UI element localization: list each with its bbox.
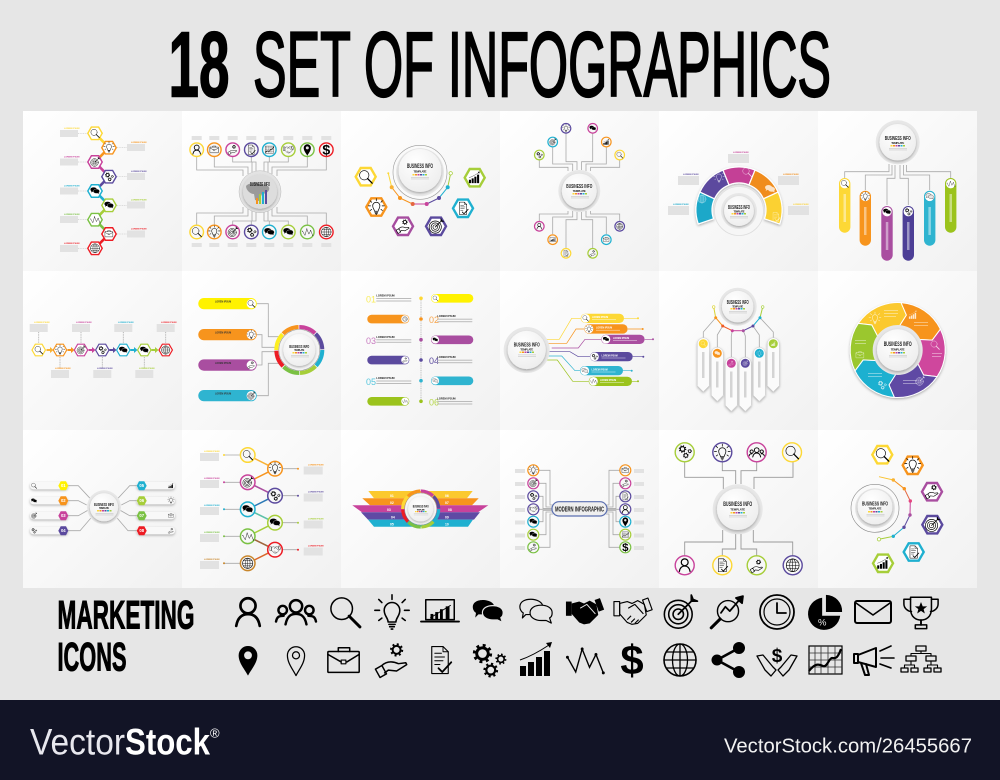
panel: half donut chart with five segments: LOREM IPSUM — [733, 152, 749, 154]
panel: circular zigzag chain — [200, 448, 324, 571]
panel: winged bands around ring: 08 — [448, 508, 452, 512]
panel: hub with eight large circle nodes: TEMPLATE — [730, 508, 745, 512]
icon: hands with dollar — [757, 646, 797, 676]
heading: marketing icons — [58, 594, 194, 680]
icon: target — [664, 595, 697, 628]
icon: filled pin — [239, 646, 257, 676]
panel: circular zigzag chain: LOREM IPSUM — [308, 492, 324, 494]
panel: horizontal hexagon timeline: LOREM IPSUM — [118, 322, 134, 324]
icon: outline handshake — [614, 598, 652, 624]
icon: envelope — [855, 601, 891, 623]
panel: horizontal hexagon timeline: LOREM IPSUM — [76, 322, 92, 324]
panel: six arrow cycle diagram: BUSINESS INFO — [884, 342, 912, 348]
panel: hub with eight large circle nodes — [675, 443, 802, 575]
panel: arc with hanging banner cards — [697, 288, 779, 411]
icon: outline chat — [520, 599, 552, 623]
panel: pills feeding colour ring — [198, 298, 332, 401]
icon: globe — [664, 644, 696, 676]
panel: winged bands around ring: 06 — [445, 494, 449, 498]
panel: numbered vertical timeline: 04 — [429, 356, 439, 366]
panel: hub with six small nodes top and bottom: TEMPLATE — [573, 189, 586, 193]
panel: circular zigzag chain: LOREM IPSUM — [308, 546, 324, 548]
panel: hub with eight nodes top and bottom: BUSINESS INFO — [250, 182, 270, 188]
panel: eight numbered rows around hub — [30, 481, 175, 535]
panel: eight numbered rows around hub: 06 — [139, 498, 145, 503]
panel: pills feeding colour ring: LOREM IPSUM — [215, 302, 231, 304]
panel: pills feeding colour ring: LOREM IPSUM — [215, 394, 231, 396]
panel: numbered vertical timeline: LOREM IPSUM — [376, 335, 395, 339]
panel: eight numbered rows around hub: 04 — [61, 528, 66, 533]
panel: numbered vertical timeline: 01 — [366, 294, 376, 304]
panel: hexagons around right arc: BUSINESS INFO — [862, 502, 888, 508]
heading: marketing icons: ICONS — [58, 636, 126, 680]
panel: half donut chart with five segments: LOREM IPSUM — [683, 174, 699, 176]
panel: circular zigzag chain: LOREM IPSUM — [204, 532, 220, 534]
panel: numbered vertical timeline: LOREM IPSUM — [376, 294, 395, 298]
panel: half donut chart with five segments: BUSINESS INFO — [728, 205, 750, 211]
panel: eight numbered rows around hub: 01 — [61, 483, 66, 488]
panel: winged bands around ring: 10 — [445, 523, 449, 527]
heading: marketing icons: MARKETING — [58, 594, 194, 638]
panel backgrounds grid — [23, 111, 977, 588]
panel: disc with lines to staggered pills: TEMPLATE — [520, 348, 533, 352]
panel: half donut chart with five segments — [668, 152, 809, 236]
icon: gears — [474, 645, 506, 676]
panel: hexagon zigzag chain: LOREM IPSUM — [131, 142, 147, 144]
panel: circular zigzag chain: LOREM IPSUM — [204, 451, 220, 453]
icon row 1 — [236, 595, 938, 630]
panel: eight numbered rows around hub: 05 — [139, 483, 145, 488]
panel: disc with lines to staggered pills: LOREM IPSUM — [596, 328, 612, 330]
panel: hexagon zigzag chain — [60, 127, 147, 255]
icon: pie chart — [808, 595, 842, 630]
icon: laptop chart — [421, 600, 459, 622]
icon: trophy — [904, 597, 938, 629]
icon: megaphone — [854, 646, 894, 675]
panel: horizontal hexagon timeline: LOREM IPSUM — [55, 368, 71, 370]
icon: filled chat — [473, 600, 503, 622]
panel: hub with six small nodes top and bottom: BUSINESS INFO — [566, 184, 593, 190]
panel: eight numbered rows around hub: 03 — [61, 513, 66, 518]
panel: numbered vertical timeline — [366, 294, 473, 408]
panel: hub with six small nodes top and bottom — [534, 124, 624, 258]
panel: six arrow cycle diagram — [850, 302, 945, 398]
panel: winged bands around ring: TEMPLATE — [417, 508, 425, 512]
footer band: Stock — [125, 721, 210, 762]
panel: hexagons around arc with disc on top — [356, 145, 485, 235]
panel: hexagon zigzag chain: LOREM IPSUM — [64, 186, 80, 188]
panel: numbered vertical timeline: 03 — [366, 336, 376, 346]
panel: hexagons around arc with disc on top: TEMPLATE — [414, 170, 426, 174]
panel: numbered vertical timeline: LOREM IPSUM — [437, 314, 456, 318]
icon row 2 — [239, 636, 941, 683]
panel: horizontal hexagon timeline: LOREM IPSUM — [97, 368, 113, 370]
panel: horizontal hexagon timeline — [30, 322, 177, 378]
panel: hexagon zigzag chain: LOREM IPSUM — [64, 128, 80, 130]
panel: disc with lines to staggered pills — [504, 314, 654, 386]
panel: half donut chart with five segments: LOREM IPSUM — [793, 204, 809, 206]
panel: half donut chart with five segments: LOREM IPSUM — [783, 174, 799, 176]
panel: eight numbered rows around hub: 02 — [61, 498, 66, 503]
panel: winged bands around ring: 09 — [445, 516, 449, 520]
panel: disc with lines to staggered pills: LOREM IPSUM — [592, 317, 608, 319]
panel: hanging pills from disc — [839, 120, 956, 261]
icon: hand with gear — [375, 644, 407, 677]
icon: team — [276, 600, 316, 624]
panel: numbered vertical timeline: LOREM IPSUM — [437, 396, 456, 400]
panel: circular zigzag chain: LOREM IPSUM — [204, 478, 220, 480]
panel: eight numbered rows around hub: 07 — [139, 513, 145, 518]
icon: outline pin — [287, 647, 305, 676]
panel: half donut chart with five segments: LOREM IPSUM — [673, 204, 689, 206]
panel: hexagons around right arc — [851, 446, 942, 572]
footer band: VectorStock.com/26455667 — [724, 736, 972, 758]
panel: hexagons around arc with disc on top: BUSINESS INFO — [407, 164, 433, 170]
icon: dollar — [620, 636, 644, 683]
panel: winged bands around ring: 03 — [387, 508, 391, 512]
icon: zigzag line — [566, 647, 605, 674]
icon: clock — [760, 595, 794, 629]
panel: half donut chart with five segments: TEMPLATE — [734, 210, 745, 214]
icon: growth bars — [520, 642, 552, 676]
panel: arc with hanging banner cards: BUSINESS INFO — [727, 300, 749, 306]
footer band: Vector — [30, 721, 125, 762]
footer band — [0, 700, 1000, 780]
icon: growth magnifier — [711, 596, 743, 628]
panel: winged bands around ring: 01 — [390, 494, 394, 498]
panel: horizontal hexagon timeline: LOREM IPSUM — [161, 322, 177, 324]
panel: hexagon zigzag chain: LOREM IPSUM — [131, 171, 147, 173]
panel: winged bands around ring: 05 — [390, 523, 394, 527]
panel: hexagon zigzag chain: LOREM IPSUM — [131, 200, 147, 202]
panel: horizontal hexagon timeline: LOREM IPSUM — [139, 368, 155, 370]
panel: disc with lines to staggered pills: LOREM IPSUM — [602, 355, 618, 357]
panel: hexagon zigzag chain: LOREM IPSUM — [64, 243, 80, 245]
panel: winged bands around ring: 07 — [445, 501, 449, 505]
panel: hanging pills from disc: TEMPLATE — [891, 141, 904, 145]
title: 18 — [168, 12, 230, 116]
panel: six arrow cycle diagram: TEMPLATE — [891, 348, 905, 352]
panel: numbered vertical timeline: LOREM IPSUM — [437, 355, 456, 359]
icon: chart grid — [809, 646, 842, 674]
panel: hanging pills from disc: BUSINESS INFO — [885, 136, 911, 142]
panel: pills feeding colour ring: LOREM IPSUM — [215, 332, 231, 334]
panel: circular zigzag chain: LOREM IPSUM — [308, 518, 324, 520]
panel: numbered vertical timeline: 05 — [366, 377, 376, 387]
icon: share — [712, 642, 745, 678]
panel: disc with lines to staggered pills: LOREM IPSUM — [592, 369, 608, 371]
panel: arc with hanging banner cards: TEMPLATE — [732, 306, 744, 308]
panel: hexagons around right arc: TEMPLATE — [868, 506, 882, 510]
panel: circular zigzag chain: LOREM IPSUM — [308, 464, 324, 466]
panel: circular zigzag chain: LOREM IPSUM — [204, 559, 220, 561]
panel: circular zigzag chain: LOREM IPSUM — [204, 505, 220, 507]
icon: filled handshake — [566, 598, 604, 624]
panel: disc with lines to staggered pills: LOREM IPSUM — [613, 338, 629, 340]
panel: disc with lines to staggered pills: LOREM IPSUM — [600, 380, 616, 382]
icon: magnifier — [331, 598, 360, 627]
title — [168, 12, 831, 116]
panel: horizontal hexagon timeline: LOREM IPSUM — [34, 322, 50, 324]
panel: modern infographic bracket: MODERN INFOGRAPHIC — [555, 506, 604, 514]
panel: numbered vertical timeline: LOREM IPSUM — [376, 376, 395, 380]
footer band: ® — [210, 726, 220, 740]
panel: eight numbered rows around hub: 08 — [139, 528, 145, 533]
panel: eight numbered rows around hub: TEMPLATE — [99, 507, 109, 510]
icon: person — [236, 598, 260, 626]
panel: winged bands around ring — [352, 484, 488, 534]
panel: winged bands around ring: 02 — [390, 501, 394, 505]
icon: document check — [432, 646, 451, 674]
panel: hexagon zigzag chain: LOREM IPSUM — [64, 156, 80, 158]
icon: light bulb — [375, 595, 409, 629]
panel: hexagon zigzag chain: LOREM IPSUM — [64, 214, 80, 216]
panel: eight numbered rows around hub: BUSINESS INFO — [94, 502, 114, 507]
panel: modern infographic bracket — [515, 465, 644, 554]
panel: numbered vertical timeline: 02 — [429, 315, 439, 325]
panel: pills feeding colour ring: TEMPLATE — [294, 349, 305, 352]
panel: numbered vertical timeline: 06 — [429, 398, 439, 408]
panel: winged bands around ring: BUSINESS INFO — [413, 504, 429, 508]
icon: briefcase — [328, 648, 359, 672]
panel: winged bands around ring: 04 — [391, 516, 395, 520]
icon: org chart — [901, 646, 941, 672]
panel: pills feeding colour ring: BUSINESS INFO — [289, 344, 310, 349]
panel: hub with eight nodes top and bottom — [190, 136, 333, 247]
panel: disc with lines to staggered pills: BUSINESS INFO — [514, 342, 540, 348]
panel: hexagon zigzag chain: LOREM IPSUM — [131, 228, 147, 230]
panel: pills feeding colour ring: LOREM IPSUM — [215, 363, 231, 365]
panel: hub with eight large circle nodes: BUSINESS INFO — [723, 501, 752, 508]
